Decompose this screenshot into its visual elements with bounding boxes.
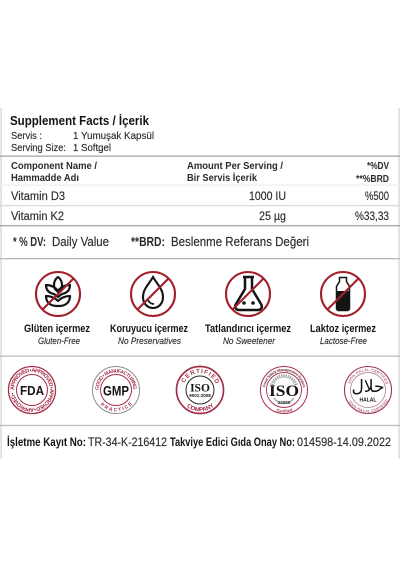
- badge: halal: [344, 366, 392, 414]
- badge: halal: 100% HALAL CERTIFIED: [348, 368, 388, 384]
- row: vitamin K2: 25 µg: [259, 211, 286, 223]
- badge: ISO 9001: CERTIFIED: [182, 368, 219, 383]
- serving info: [11, 130, 154, 154]
- badge: ISO 9001: ISO: [190, 382, 210, 394]
- registration line: 014598-14.09.2022: [297, 435, 391, 449]
- row: vitamin K2: [11, 211, 389, 223]
- table header: **%BRD: [356, 173, 389, 185]
- label: no sweetener: No Sweetener: [223, 336, 276, 347]
- row: vitamin K2: %33,33: [355, 211, 389, 223]
- badge: ISO 22000: Food Safety Management System: [262, 368, 305, 388]
- registration line: Takviye Edici Gıda Onay No:: [170, 435, 295, 449]
- panel: nutrition table: [11, 160, 389, 223]
- label: lactose free: Laktoz içermez: [310, 323, 376, 335]
- badge: FDA approved: APPROVED • APPROVED • APPROVED • APPROVED •: [10, 368, 54, 412]
- row: vitamin D3: [11, 191, 389, 203]
- label: gluten free: [24, 323, 90, 347]
- badge: GMP: [92, 366, 140, 414]
- label: no sweetener: Tatlandırıcı içermez: [205, 323, 291, 335]
- row: vitamin D3: Vitamin D3: [11, 191, 65, 203]
- table header: Amount Per Serving /: [187, 160, 283, 172]
- legend notes: **BRD:: [131, 235, 165, 249]
- panel: supplement header: [10, 113, 154, 154]
- row: vitamin K2: Vitamin K2: [11, 211, 64, 223]
- icon: no sweetener: [226, 272, 270, 316]
- serving info: Serving Size:: [11, 142, 66, 154]
- label: no sweetener: [205, 323, 291, 347]
- label: no preservatives: No Preservatives: [118, 336, 181, 347]
- badge: ISO 22000: [260, 366, 308, 414]
- row: vitamin D3: 1000 IU: [249, 191, 286, 203]
- badge: ISO 22000: 22000: [278, 400, 291, 405]
- badge: FDA approved: FDA: [20, 383, 45, 398]
- legend notes: Beslenme Referans Değeri: [171, 235, 309, 249]
- badge: GMP: GMP: [103, 382, 129, 398]
- badge: ISO 22000: ISO: [269, 383, 299, 400]
- table header: Component Name /: [11, 160, 97, 172]
- icon: gluten free: [36, 272, 80, 316]
- label: gluten free: Gluten-Free: [38, 336, 80, 347]
- badge: ISO 9001: COMPANY: [187, 403, 213, 412]
- badge: GMP: PRACTICE: [100, 402, 132, 412]
- legend notes: Daily Value: [52, 235, 109, 249]
- legend notes: [13, 235, 309, 249]
- registration line: TR-34-K-216412: [88, 435, 167, 449]
- table header: *%DV: [367, 160, 389, 172]
- table header: [11, 160, 389, 185]
- legend notes: * % DV:: [13, 235, 46, 249]
- label: no preservatives: [110, 323, 188, 347]
- badge: halal: HALAL: [360, 398, 376, 404]
- registration line: [7, 434, 391, 449]
- badge: ISO 22000: Certified: [276, 408, 292, 412]
- label: lactose free: [310, 323, 376, 347]
- icon: no preservatives: [131, 272, 175, 316]
- registration line: İşletme Kayıt No:: [7, 434, 86, 449]
- label: no preservatives: Koruyucu içermez: [110, 323, 188, 335]
- serving info: 1 Yumuşak Kapsül: [73, 130, 154, 142]
- label: lactose free: Lactose-Free: [320, 336, 367, 347]
- serving info: Servis :: [11, 130, 42, 142]
- badge: halal: 100% HALAL CERTIFIED: [348, 399, 388, 413]
- label: gluten free: Glüten içermez: [24, 323, 90, 335]
- icon: lactose free: [321, 272, 365, 316]
- badge: GMP: GOOD • MANUFACTURING: [95, 369, 137, 390]
- badge: halal: حلال: [351, 377, 385, 397]
- table header: Hammadde Adı: [11, 172, 79, 184]
- title: Supplement Facts / İçerik: [10, 113, 150, 128]
- row: vitamin D3: %500: [365, 191, 389, 203]
- badge: ISO 9001: [176, 366, 224, 414]
- table header: Bir Servis İçerik: [187, 171, 257, 184]
- serving info: 1 Softgel: [73, 142, 111, 154]
- badge: ISO 9001: 9001:2008: [189, 393, 211, 398]
